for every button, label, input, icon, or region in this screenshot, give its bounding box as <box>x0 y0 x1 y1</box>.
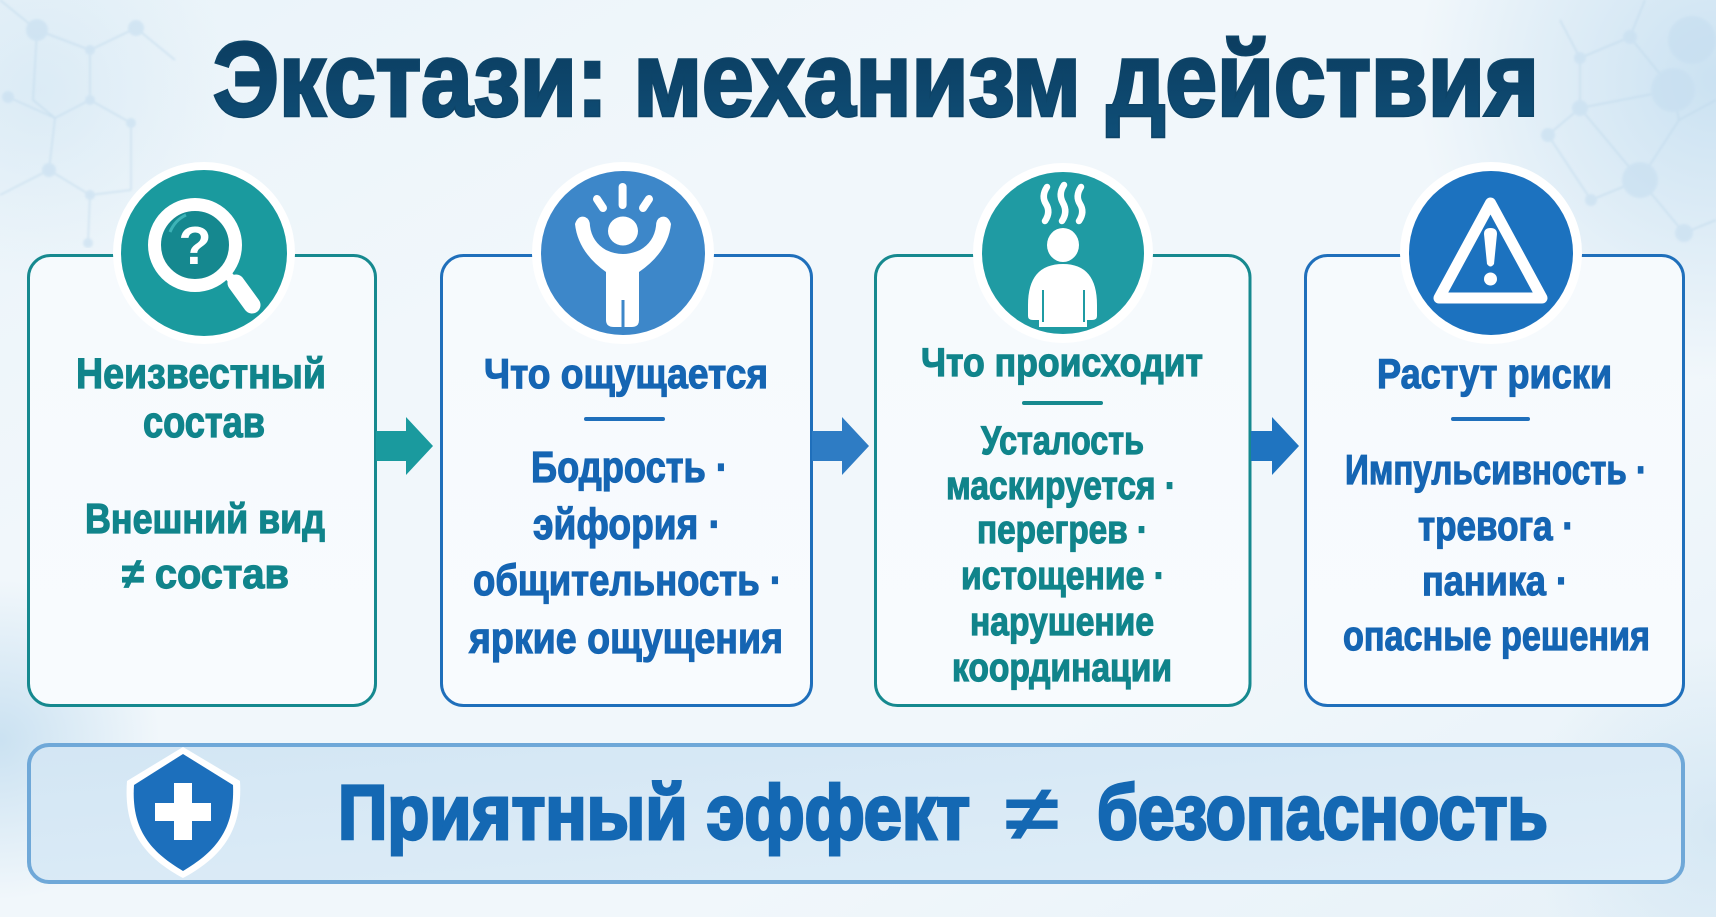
text: what happens details: Усталость <box>981 419 1144 463</box>
text: pleasant effect is not safety: безопасность <box>1097 770 1548 856</box>
text: felt effects: Бодрость · <box>531 443 728 492</box>
icon: magnifier with question mark <box>113 162 295 344</box>
heading: unknown composition: состав <box>143 398 265 447</box>
text: pleasant effect is not safety <box>338 769 1548 857</box>
panel: what happens <box>876 163 1250 706</box>
text: felt effects: общительность · <box>473 556 782 605</box>
divider <box>1451 417 1530 421</box>
icon: overheated person <box>973 163 1153 343</box>
icon: joyful person with raised arms <box>532 162 714 344</box>
arrow: step 1 to 2 <box>376 417 433 475</box>
text: what happens details: координации <box>952 646 1172 690</box>
text: felt effects: яркие ощущения <box>468 614 783 663</box>
text: felt effects <box>468 443 783 663</box>
text: risks list: паника · <box>1422 557 1568 604</box>
icon: shield with cross <box>127 747 240 878</box>
icon: magnifier with question mark: ? <box>178 216 212 276</box>
icon: warning triangle <box>1400 162 1582 344</box>
text: what happens details: истощение · <box>961 554 1165 598</box>
text: risks list <box>1343 446 1650 659</box>
text: what happens details <box>946 419 1176 690</box>
panel: what is felt <box>442 162 812 706</box>
panel: unknown composition <box>28 162 376 706</box>
text: appearance is not composition: ≠ состав <box>122 550 289 597</box>
heading: what happens: Что происходит <box>921 341 1203 385</box>
panel: bottom banner <box>29 745 1683 882</box>
arrow: step 2 to 3 <box>812 417 869 475</box>
text: felt effects: эйфория · <box>533 500 721 549</box>
text: appearance is not composition <box>85 495 325 597</box>
heading: risks grow: Растут риски <box>1377 350 1612 397</box>
panel: risks grow <box>1306 162 1684 706</box>
title: Экстази: механизм действия <box>213 22 1539 138</box>
divider <box>1022 401 1103 405</box>
text: risks list: тревога · <box>1418 502 1574 549</box>
text: what happens details: перегрев · <box>977 508 1148 552</box>
text: pleasant effect is not safety: Приятный эффект <box>338 770 970 856</box>
text: what happens details: нарушение <box>970 600 1154 644</box>
heading: unknown composition: Неизвестный <box>76 350 326 398</box>
text: risks list: опасные решения <box>1343 612 1650 659</box>
text: pleasant effect is not safety: ≠ <box>1005 769 1059 857</box>
heading: what is felt: Что ощущается <box>484 350 768 397</box>
text: what happens details: маскируется · <box>946 464 1176 508</box>
text: appearance is not composition: Внешний вид <box>85 495 325 542</box>
heading: unknown composition <box>76 350 326 447</box>
arrow: step 3 to 4 <box>1251 417 1299 475</box>
divider <box>584 417 665 421</box>
